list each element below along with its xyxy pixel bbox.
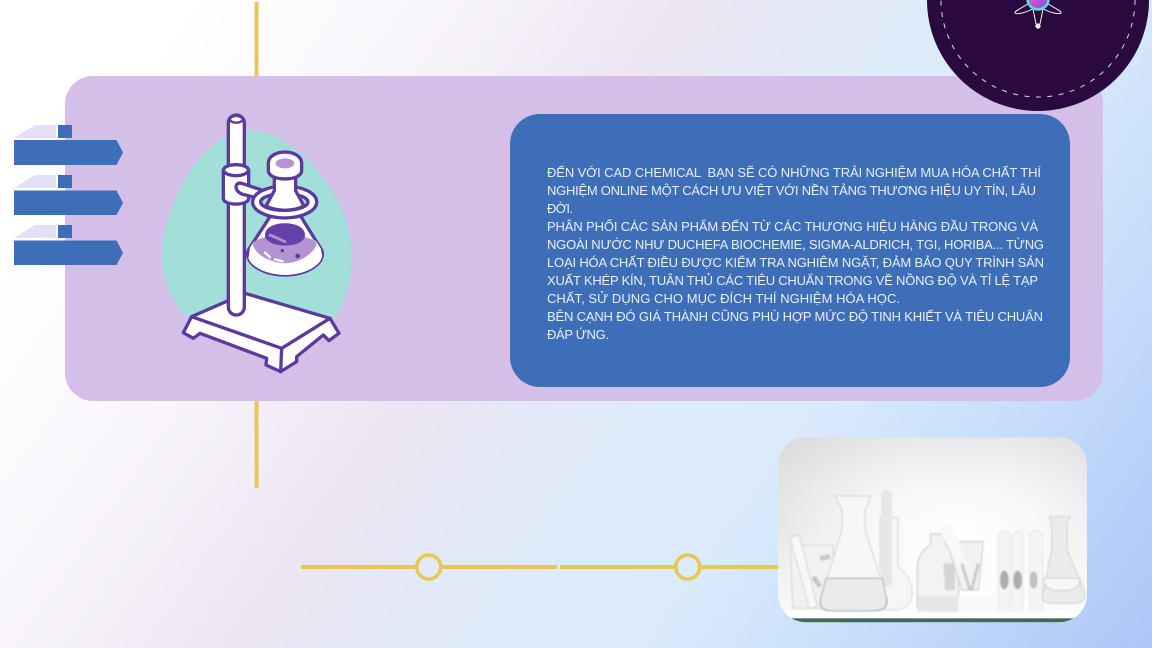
decorative labels: three blue ribbon tabs — [14, 125, 123, 265]
vertical yellow line bottom — [254, 400, 258, 488]
icon: dark circle badge with atom — [927, 0, 1149, 111]
reflective shelf — [778, 612, 1087, 618]
bottle — [917, 534, 959, 613]
icon: lab stand holding a flask — [162, 115, 352, 372]
panel: lilac background card — [65, 76, 1103, 401]
erlenmeyer flask — [820, 496, 887, 612]
text block: description: NGHIỆM ONLINE MỘT CÁCH ƯU VIỆT VỚI NỀN TẢNG THƯƠNG HIỆU UY TÍN, LÂU — [547, 183, 1036, 198]
text block: description: NGOÀI NƯỚC NHƯ DUCHEFA BIOCHEMIE, SIGMA-ALDRICH, TGI, HORIBA... TỪNG — [547, 237, 1044, 252]
vertical yellow line top — [254, 2, 258, 78]
text block: description: CHẤT, SỬ DỤNG CHO MỤC ĐÍCH THÍ NGHIỆM HÓA HỌC. — [547, 291, 900, 306]
text block: description: PHÂN PHỐI CÁC SẢN PHẨM ĐẾN TỪ CÁC THƯƠNG HIỆU HÀNG ĐẦU TRONG VÀ — [547, 219, 1038, 234]
text block: description: ĐỜI. — [547, 201, 573, 216]
text block: description — [547, 165, 1044, 342]
text block: description: BÊN CẠNH ĐÓ GIÁ THÀNH CŨNG PHÙ HỢP MỨC ĐỘ TINH KHIẾT VÀ TIÊU CHUẨN — [547, 309, 1043, 324]
right flask — [1042, 517, 1085, 603]
timeline: yellow line with two rings — [301, 555, 779, 579]
text block: description: ĐẾN VỚI CAD CHEMICAL BẠN SẼ CÓ NHỮNG TRẢI NGHIỆM MUA HÓA CHẤT THÍ — [547, 165, 1041, 180]
test tubes — [998, 531, 1043, 621]
text block: description: LOẠI HÓA CHẤT ĐIỀU ĐƯỢC KIỂM TRA NGHIÊM NGẶT, ĐẢM BẢO QUY TRÌNH SẢN — [547, 255, 1044, 270]
text block: description: ĐÁP ỨNG. — [547, 327, 609, 342]
icon: atom — [1015, 0, 1061, 29]
beaker — [790, 535, 833, 608]
text block: description: XUẤT KHÉP KÍN, TUÂN THỦ CÁC TIÊU CHUẨN TRONG VỀ NỒNG ĐỘ VÀ TỈ LỆ TẠP — [547, 273, 1038, 288]
panel: blue text card — [510, 114, 1070, 387]
round flask with pipette — [878, 516, 914, 611]
photo: laboratory glassware — [778, 437, 1087, 622]
small glass with tubes — [947, 542, 983, 590]
